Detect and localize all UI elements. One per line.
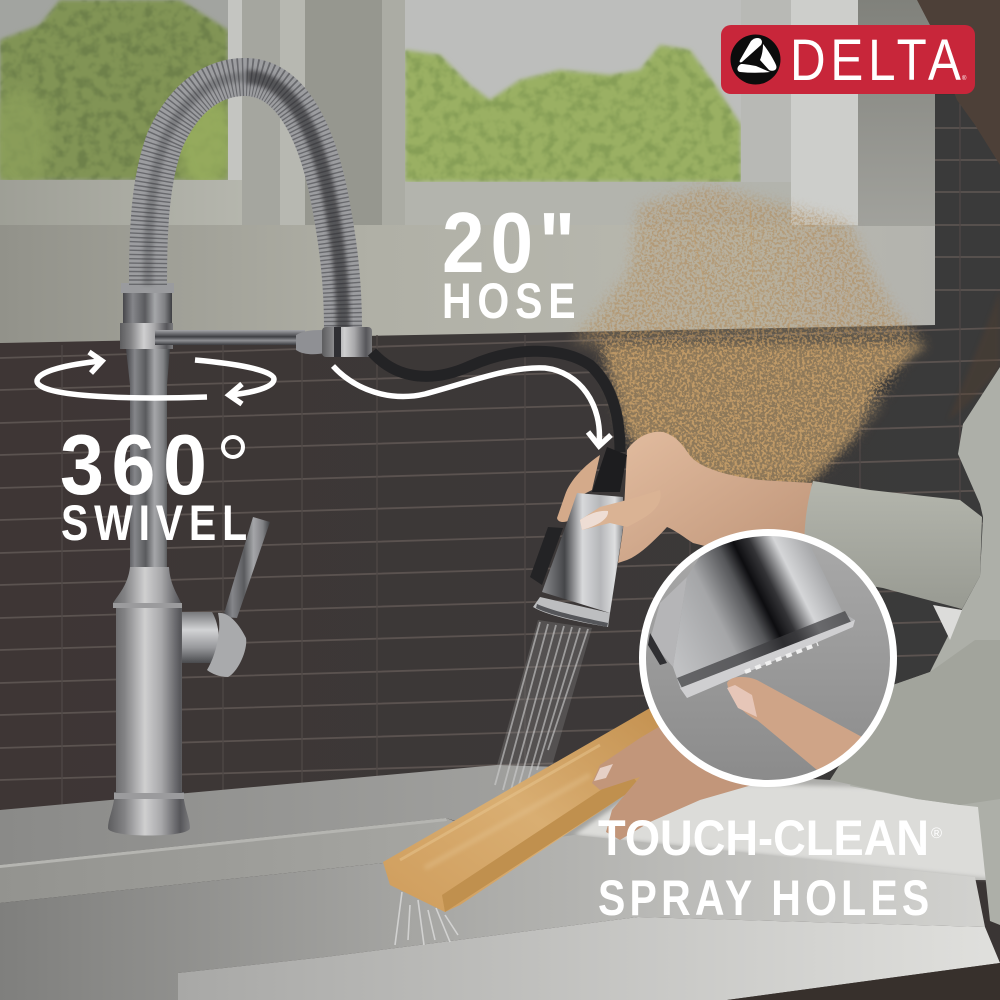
label: touch-clean spray holes: ® — [931, 825, 942, 842]
sleeve — [804, 481, 982, 609]
faucet — [108, 77, 372, 836]
counter bottom shadow — [727, 963, 1000, 1000]
inset detail circle — [642, 525, 894, 800]
cone — [542, 493, 623, 613]
logo mark — [730, 34, 780, 84]
inset spray holes — [745, 644, 818, 672]
hair strands — [948, 290, 1000, 420]
label: touch-clean spray holes: SPRAY HOLES — [598, 870, 929, 926]
faucet collar — [120, 283, 174, 349]
inset finger — [727, 676, 862, 770]
torso — [850, 367, 1000, 925]
black pull-down hose — [372, 351, 620, 452]
index finger — [557, 455, 600, 522]
window frame and wall band — [0, 0, 935, 345]
body collars — [113, 603, 184, 799]
dried plant — [570, 187, 927, 490]
lower hand — [592, 725, 752, 840]
label: 20 inch hose: 20" — [442, 196, 575, 291]
label: 360 swivel: SWIVEL — [61, 495, 247, 551]
sweater — [804, 367, 1000, 925]
label: touch-clean spray holes — [598, 810, 942, 926]
switch — [530, 527, 563, 585]
label: 20 inch hose: HOSE — [442, 273, 576, 329]
water dripping below board — [395, 892, 458, 945]
wooden cutting board — [383, 708, 665, 912]
label: 360 swivel: 360 — [60, 418, 207, 513]
spout arm — [155, 330, 305, 345]
thumb nail — [580, 511, 608, 530]
window pane right with trees — [405, 0, 741, 182]
thumb over sprayer — [580, 490, 661, 530]
label: touch-clean spray holes: TOUCH-CLEAN — [598, 810, 929, 866]
lower nail — [594, 764, 613, 781]
inset dark band — [677, 611, 851, 690]
faucet shoulder and body — [108, 567, 190, 836]
sink near rim — [178, 917, 1000, 1000]
coupling — [296, 327, 372, 357]
hose arrow — [333, 366, 611, 446]
counter top — [0, 765, 1000, 880]
window pane left with trees — [0, 0, 233, 190]
inset nail — [727, 685, 757, 717]
Delta logo badge: DELTA — [790, 28, 961, 93]
swivel arrows — [37, 352, 274, 404]
white bowl behind arm — [933, 605, 962, 640]
Delta logo badge — [721, 25, 975, 94]
inset rim — [680, 620, 855, 698]
hand holding sprayer — [557, 432, 812, 563]
water spray — [490, 620, 592, 790]
palm — [618, 432, 812, 563]
rim — [533, 597, 610, 627]
inset left detail — [650, 577, 687, 667]
sink basin — [0, 835, 985, 1000]
lower arm — [830, 640, 1000, 805]
Delta logo badge: ® — [962, 75, 967, 82]
spray head — [530, 447, 627, 627]
coil spring spout — [148, 77, 343, 330]
neck — [592, 447, 627, 492]
person face — [917, 0, 1000, 165]
lever handle — [182, 517, 270, 677]
faucet stem — [126, 349, 170, 570]
inset spray head — [673, 536, 854, 688]
sink inner wall — [0, 818, 520, 903]
label: 360 swivel — [60, 418, 247, 551]
tile backsplash — [0, 95, 1000, 820]
counter right surface — [574, 782, 1000, 880]
